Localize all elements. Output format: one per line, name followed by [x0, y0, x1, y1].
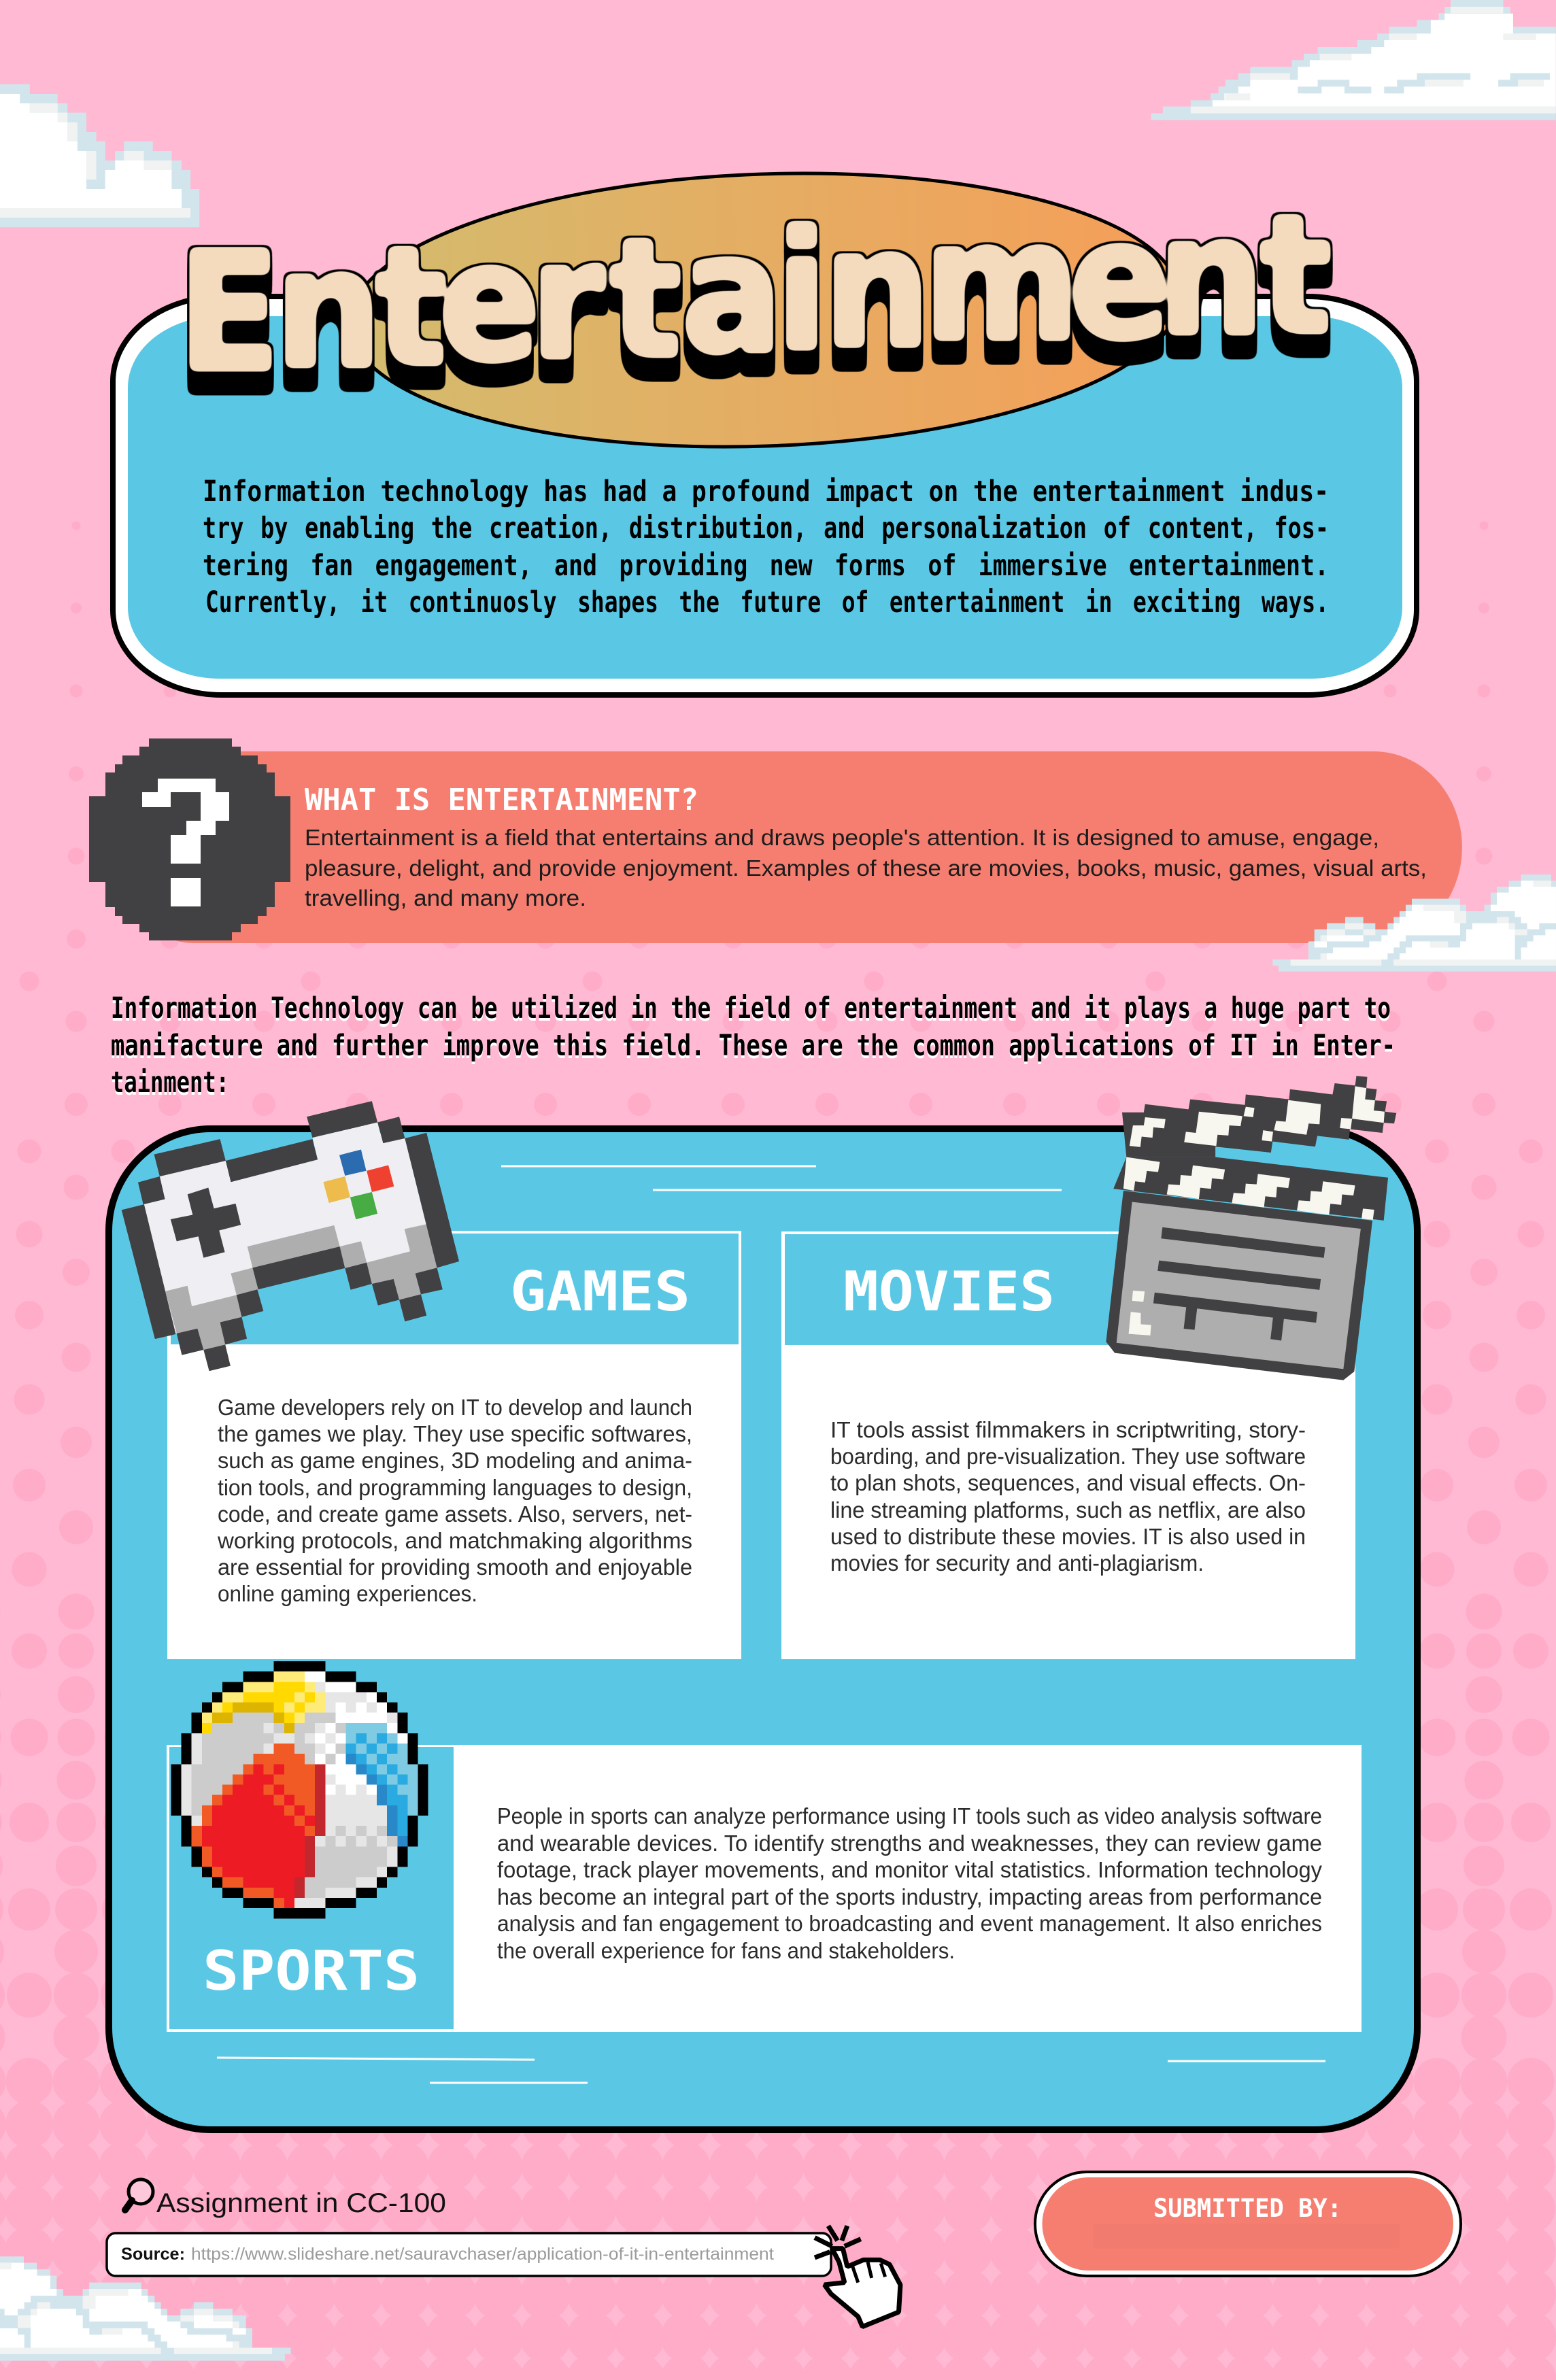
- icon: pointer hand: [815, 2226, 900, 2327]
- lead-in text: tainment:: [111, 1066, 229, 1100]
- background halftone dots: [0, 526, 1556, 2380]
- text: movies: used to distribute these movies. IT is also used in: [830, 1524, 1306, 1549]
- intro paragraph: tering fan engagement, and providing new forms of immersive entertainment.: [203, 549, 1329, 583]
- text: sports: and wearable devices. To identify strengths and weaknesses, they can review game: [497, 1831, 1322, 1856]
- title: Entertainment: [178, 179, 1332, 409]
- source bar: https://www.slideshare.net/sauravchaser/application-of-it-in-entertainment: [191, 2245, 774, 2264]
- text: games: tion tools, and programming languages to design,: [218, 1475, 692, 1500]
- text: movies: to plan shots, sequences, and visual effects. On-: [830, 1470, 1306, 1495]
- text: movies: boarding, and pre-visualization. They use software: [830, 1444, 1306, 1469]
- heading: movies: MOVIES: [843, 1260, 1055, 1323]
- icon: pixel beach ball: [171, 1661, 428, 1918]
- text: movies: [830, 1417, 1306, 1576]
- intro paragraph: Information technology has had a profound impact on the entertainment indus-: [203, 475, 1329, 509]
- panel: what is entertainment: [163, 751, 1462, 943]
- panel: intro header: [113, 160, 1417, 695]
- text: games: are essential for providing smooth and enjoyable: [218, 1554, 692, 1580]
- pixel cloud: middle right: [1272, 874, 1556, 972]
- text: games: working protocols, and matchmaking algorithms: [217, 1528, 692, 1553]
- text: movies: line streaming platforms, such as netflix, are also: [830, 1497, 1306, 1523]
- heading: games: GAMES: [510, 1260, 690, 1323]
- icon: pixel question mark: [89, 738, 290, 940]
- text: sports: People in sports can analyze performance using IT tools such as video analysis software: [497, 1803, 1322, 1829]
- assignment text: Assignment in CC-100: [156, 2188, 446, 2218]
- card: movies: [781, 1231, 1355, 1659]
- text: games: online gaming experiences.: [218, 1581, 477, 1606]
- text: sports: the overall experience for fans and stakeholders.: [497, 1938, 955, 1963]
- intro paragraph: [203, 475, 1329, 619]
- definition text: [305, 825, 1427, 911]
- text: movies: IT tools assist filmmakers in scriptwriting, story-: [830, 1417, 1306, 1442]
- gradient ellipse behind title: [345, 160, 1184, 460]
- text: sports: footage, track player movements, and monitor vital statistics. Information technology: [497, 1857, 1322, 1882]
- submitted by label: SUBMITTED BY:: [1153, 2194, 1342, 2223]
- text: sports: has become an integral part of the sports industry, impacting areas from performance: [497, 1884, 1322, 1909]
- text: games: code, and create game assets. Also, servers, net-: [218, 1501, 692, 1527]
- text: movies: movies for security and anti-plagiarism.: [830, 1550, 1204, 1576]
- submitted by pill: [1035, 2172, 1461, 2276]
- text: games: [217, 1395, 692, 1606]
- text: sports: analysis and fan engagement to broadcasting and event management. It also enriches: [497, 1911, 1322, 1936]
- pixel cloud: bottom left: [0, 2256, 291, 2361]
- card: games: [167, 1231, 741, 1659]
- text: games: the games we play. They use specific softwares,: [218, 1421, 692, 1446]
- heading: sports: SPORTS: [203, 1939, 420, 2003]
- icon: magnifier: [125, 2179, 153, 2210]
- pixel cloud: top left: [0, 84, 199, 227]
- text: games: Game developers rely on IT to develop and launch: [218, 1395, 692, 1420]
- text: games: such as game engines, 3D modeling and anima-: [218, 1448, 692, 1473]
- lead-in text: [111, 991, 1396, 1100]
- icon: pixel game controller: [122, 1101, 459, 1371]
- source bar: Source:: [121, 2245, 185, 2264]
- source bar: [107, 2233, 831, 2276]
- panel: applications: [109, 1129, 1417, 2130]
- magnifier and assignment label: [125, 2179, 446, 2218]
- card: sports: [167, 1745, 1362, 2032]
- text: sports: [497, 1803, 1322, 1963]
- heading: WHAT IS ENTERTAINMENT?: [305, 783, 698, 817]
- definition text: pleasure, delight, and provide enjoyment. Examples of these are movies, books, music, games, visual arts,: [305, 855, 1427, 881]
- definition text: travelling, and many more.: [305, 885, 586, 911]
- icon: pixel clapperboard: [1106, 1076, 1396, 1380]
- pixel cloud: top right: [1151, 0, 1556, 120]
- definition text: Entertainment is a field that entertains and draws people's attention. It is designed to amuse, engage,: [305, 825, 1379, 850]
